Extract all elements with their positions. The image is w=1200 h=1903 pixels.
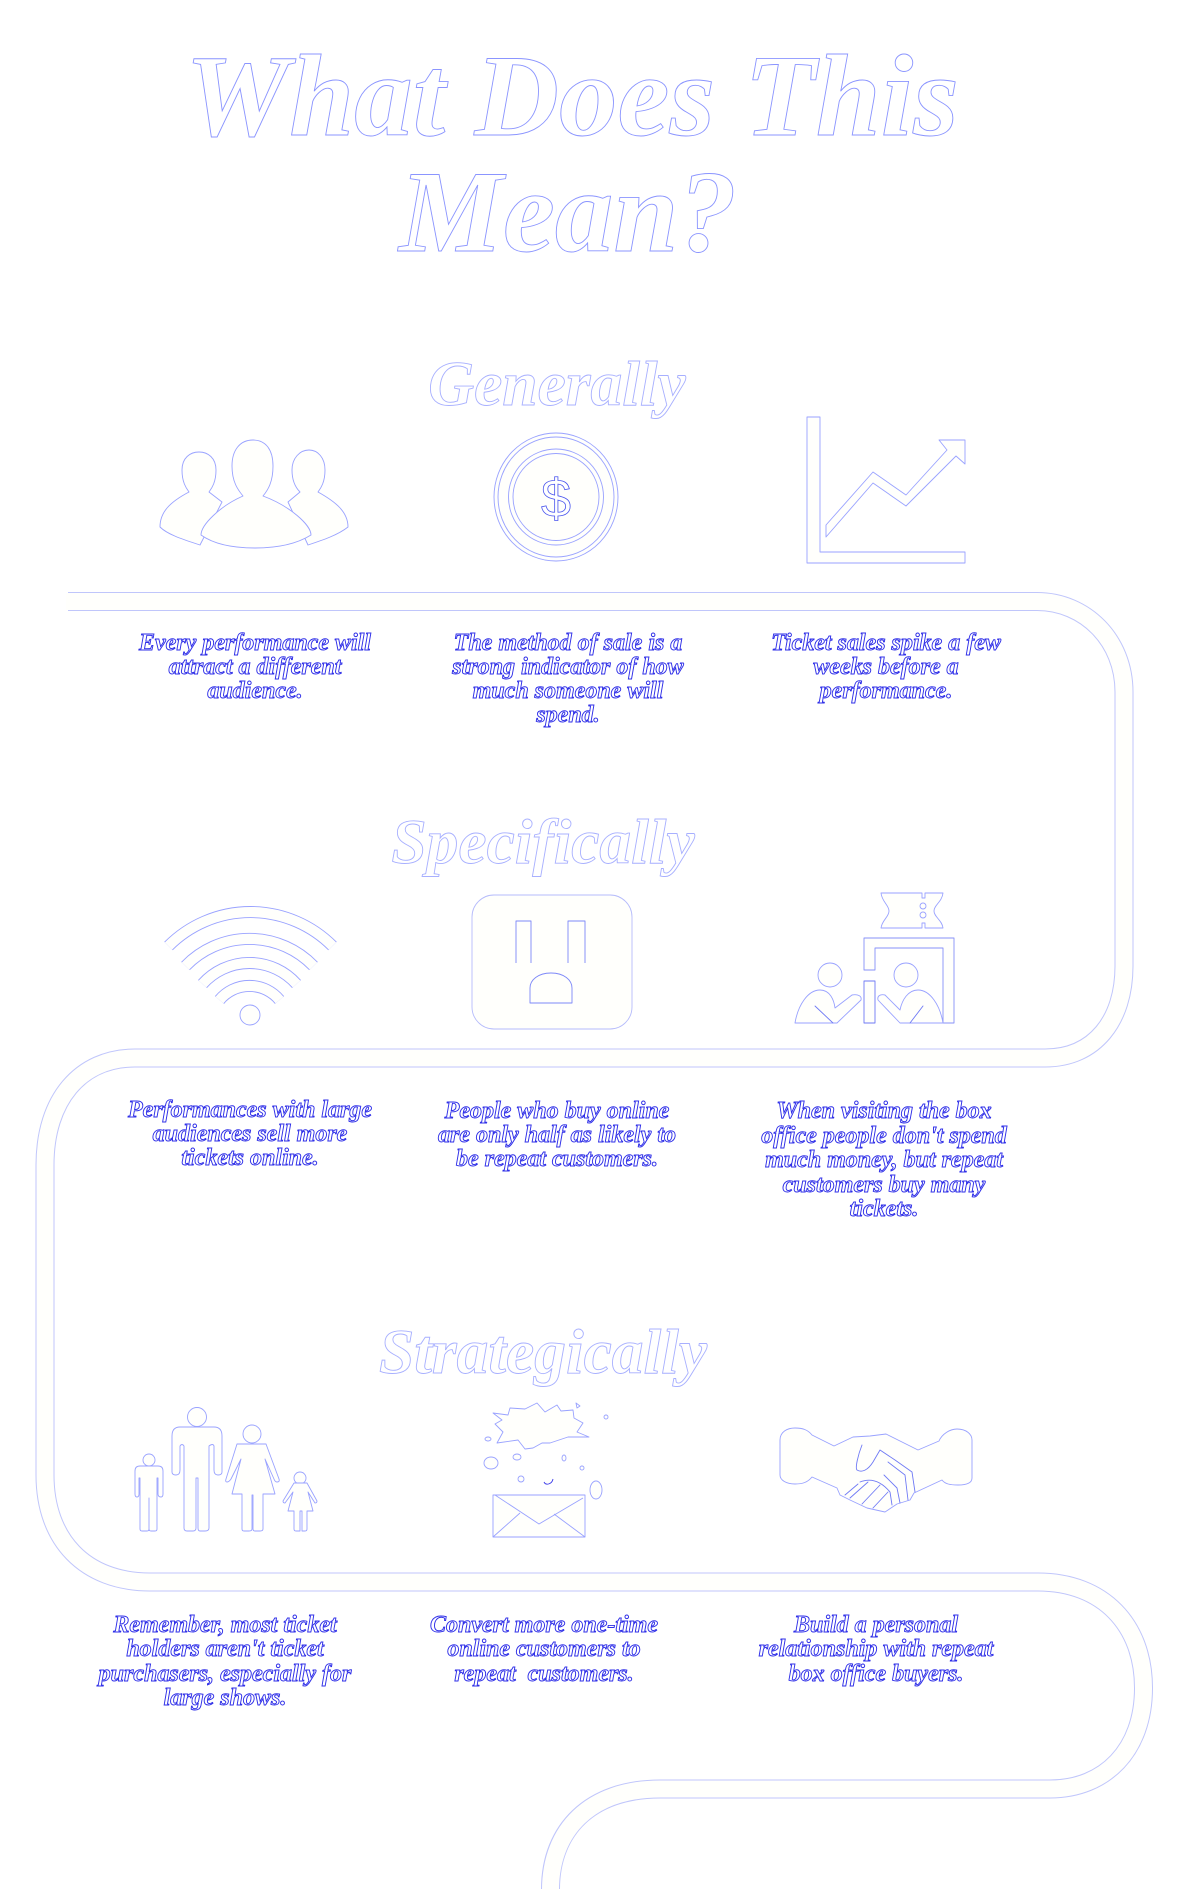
text: method of sale [451, 630, 685, 728]
text: box office visits: much money, but repeat [765, 1147, 1004, 1173]
text: ticket holders: large shows. [164, 1685, 286, 1711]
text: method of sale: much someone will [473, 678, 664, 704]
text: personal relationship [759, 1612, 995, 1687]
panel: generally [138, 348, 1002, 728]
heading: strategically: Strategically [379, 1316, 708, 1387]
winding ribbon path [45, 602, 1144, 1890]
icon: power outlet [472, 895, 632, 1029]
text: every performance: attract a different [169, 654, 343, 680]
text: box office visits: office people don't spend [761, 1123, 1008, 1149]
text: convert online customers: repeat customers. [454, 1661, 634, 1687]
text: ticket sales spike: Ticket sales spike a few [771, 630, 1002, 656]
text: box office visits [761, 1098, 1008, 1222]
text: convert online customers: Convert more one-time [430, 1612, 658, 1638]
text: ticket holders: Remember, most ticket [112, 1612, 338, 1638]
text: online buyers repeat: People who buy online [444, 1098, 670, 1124]
text: every performance: Every performance will [138, 630, 371, 656]
text: online buyers repeat: are only half as likely to [438, 1122, 676, 1148]
heading: specifically: Specifically [391, 806, 695, 877]
text: every performance [138, 630, 371, 704]
text: method of sale: spend. [535, 702, 600, 728]
icon: wifi signal [168, 912, 332, 1025]
text: large audiences online [127, 1097, 372, 1171]
text: method of sale: strong indicator of how [451, 654, 685, 680]
icon: family [135, 1408, 317, 1531]
text: box office visits: tickets. [850, 1196, 918, 1222]
panel: specifically [127, 806, 1008, 1222]
icon: dollar coin: $ [541, 469, 571, 529]
heading: generally: Generally [428, 348, 687, 419]
text: ticket holders: purchasers, especially for [97, 1661, 352, 1687]
text: personal relationship: box office buyers. [789, 1661, 963, 1687]
text: online buyers repeat [438, 1098, 676, 1172]
text: ticket sales spike: weeks before a [813, 654, 959, 680]
text: large audiences online: Performances with large [127, 1097, 372, 1123]
text: box office visits: When visiting the box [776, 1098, 992, 1124]
title: Mean? [397, 148, 737, 277]
text: ticket holders: holders aren't ticket [126, 1636, 325, 1662]
title [185, 32, 959, 277]
text: convert online customers: online customers to [447, 1636, 641, 1662]
text: ticket holders [97, 1612, 352, 1711]
icon: dollar coin [494, 433, 618, 561]
panel: strategically [97, 1316, 995, 1711]
text: personal relationship: Build a personal [793, 1612, 958, 1638]
text: online buyers repeat: be repeat customers. [456, 1146, 658, 1172]
text: every performance: audience. [207, 678, 303, 704]
text: convert online customers [430, 1612, 658, 1687]
text: personal relationship: relationship with repeat [759, 1636, 995, 1662]
text: ticket sales spike: performance. [818, 678, 952, 704]
text: large audiences online: tickets online. [181, 1145, 319, 1171]
icon: group of people [160, 440, 348, 548]
text: method of sale: The method of sale is a [454, 630, 682, 656]
text: box office visits: customers buy many [783, 1172, 986, 1198]
icon: box office ticket seller [795, 893, 954, 1023]
text: ticket sales spike [771, 630, 1002, 704]
icon: rising line chart [807, 417, 965, 563]
title: What Does This [185, 32, 959, 161]
icon: handshake [780, 1428, 972, 1512]
icon: envelope with confetti burst [484, 1403, 608, 1537]
text: large audiences online: audiences sell more [153, 1121, 348, 1147]
